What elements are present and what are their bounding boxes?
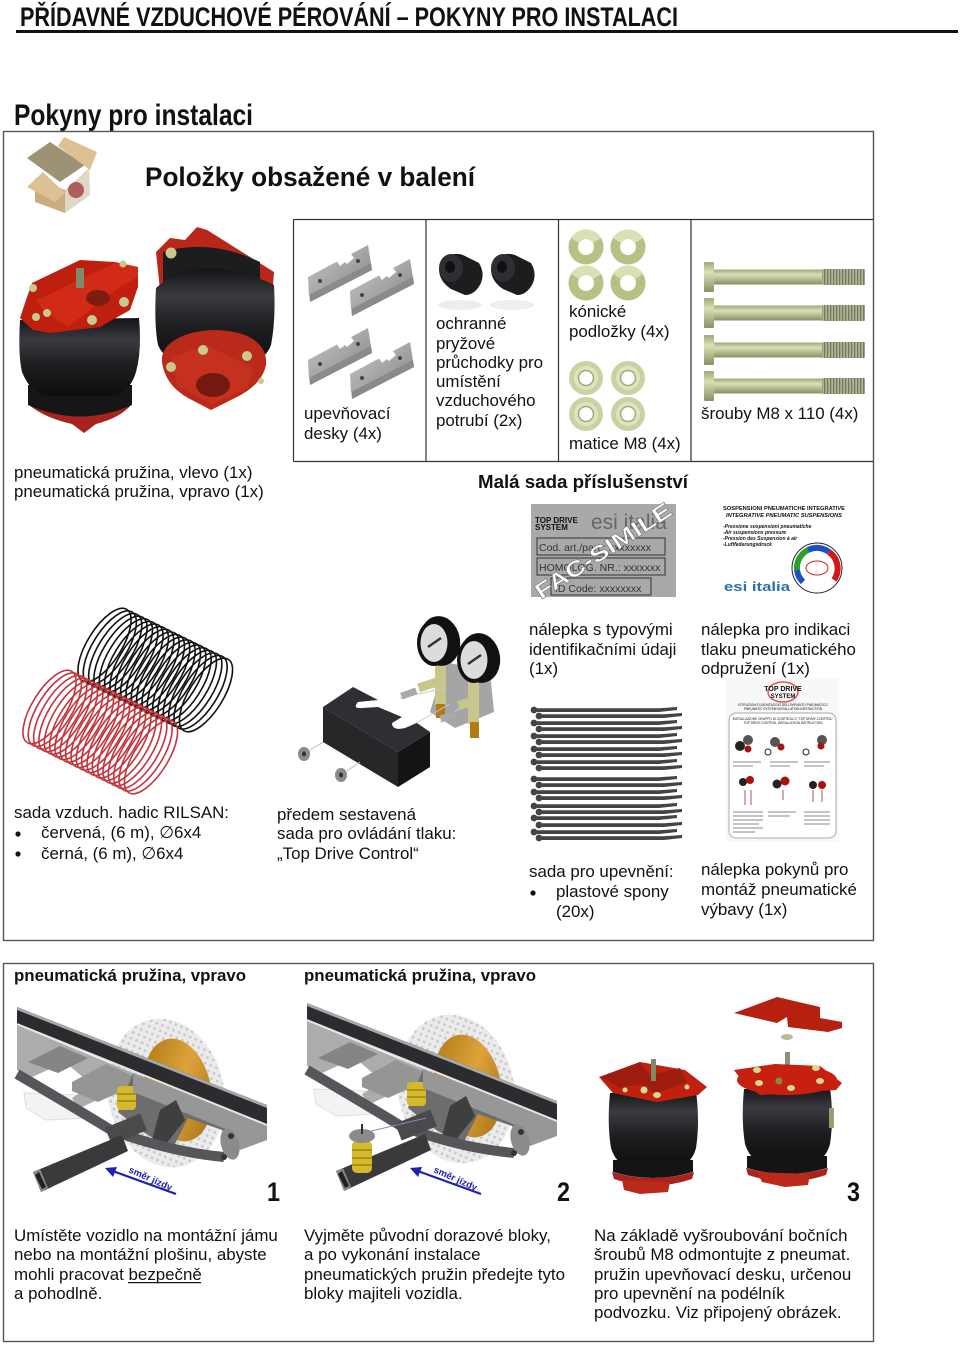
sticker: identification plate: SYSTEM — [535, 523, 568, 532]
text: step 1 instructions — [14, 1226, 278, 1303]
sticker: pressure indicator: -Pressione sospensioni pneumatiche — [723, 524, 812, 530]
text: step 1 instructions: a pohodlně. — [14, 1284, 102, 1303]
text: step 3 instructions: podvozku. Viz připojený obrázek. — [594, 1303, 842, 1322]
number: step 3: 3 — [847, 1177, 860, 1207]
label: hose kit: červená, (6 m), ∅6x4 — [41, 823, 201, 842]
label: fastening kit: plastové spony — [556, 882, 669, 901]
label: instruction sticker: montáž pneumatické — [701, 880, 857, 899]
sticker: identification plate: FAC-SIMILE — [530, 497, 676, 604]
sticker: installation instructions: SYSTEM — [771, 694, 795, 700]
label: air springs: pneumatická pružina, vpravo (1x) — [14, 482, 264, 501]
panel: package contents — [4, 132, 874, 940]
label: pressure sticker: odpružení (1x) — [701, 659, 810, 678]
text: step 3 instructions: pružin upevňovací desku, určenou — [594, 1265, 851, 1284]
illustration: step 1 vehicle axle — [17, 1007, 267, 1194]
section heading: Pokyny pro instalaci — [14, 99, 253, 132]
label: identification sticker: nálepka s typovými — [529, 620, 673, 639]
label: rubber grommets: průchodky pro — [436, 353, 543, 372]
sticker: installation instructions: TOP DRIVE — [764, 686, 802, 693]
sticker: identification plate: HOMOLOG. NR.: xxxxxxx — [539, 562, 661, 574]
label: pressure sticker: nálepka pro indikaci — [701, 620, 850, 639]
heading: small accessory kit: Malá sada příslušenství — [478, 471, 689, 492]
sticker: installation instructions: ISTRUZIONI DI MONTAGGIO DELL'IMPIANTO PNEUMATICO — [738, 703, 828, 707]
label: instruction sticker: nálepka pokynů pro — [701, 860, 848, 879]
sticker: installation instructions: INSTALLAZIONE GRUPPO DI CONTROLLO "TOP DRIVE CONTROL" — [733, 717, 833, 721]
illustration: step 3 air spring exploded — [734, 997, 842, 1187]
sticker: installation instructions: TOP DRIVE CONTROL INSTALLATION INSTRUCTION — [743, 721, 823, 725]
sticker: identification plate — [530, 497, 676, 604]
text: step 2 instructions: bloky majiteli vozidla. — [304, 1284, 463, 1303]
label: pressure control kit: předem sestavená — [277, 805, 417, 824]
text: step 1 instructions: Umístěte vozidlo na montážní jámu — [14, 1226, 278, 1245]
number: step 1: 1 — [267, 1177, 280, 1207]
illustration: mounting plates — [308, 245, 414, 399]
label: air springs: pneumatická pružina, vlevo (1x) — [14, 463, 252, 482]
label: instruction sticker: výbavy (1x) — [701, 900, 787, 919]
sticker: pressure indicator: INTEGRATIVE PNEUMATIC SUSPENSIONS — [726, 513, 842, 519]
label: rubber grommets: potrubí (2x) — [436, 411, 522, 430]
illustration: right air spring — [155, 227, 275, 410]
label: pressure control kit: sada pro ovládání tlaku: — [277, 824, 456, 843]
text: step 1 instructions: nebo na montážní plošinu, abyste — [14, 1245, 267, 1264]
text: step 2 instructions: a po vykonání instalace — [304, 1245, 481, 1264]
heading: items in package: Položky obsažené v balení — [145, 162, 476, 192]
label: pressure control kit: „Top Drive Control“ — [277, 844, 419, 863]
label: hose kit — [14, 803, 229, 863]
label: fastening kit: (20x) — [556, 902, 594, 921]
illustration: conical washers — [568, 230, 646, 300]
page title: PŘÍDAVNÉ VZDUCHOVÉ PÉROVÁNÍ – POKYNY PRO INSTALACI — [20, 1, 678, 32]
heading: step 2: pneumatická pružina, vpravo — [304, 966, 536, 985]
text: step 2 instructions: Vyjměte původní dorazové bloky, — [304, 1226, 551, 1245]
label: hose kit: černá, (6 m), ∅6x4 — [41, 844, 183, 863]
icon: cardboard box — [27, 137, 97, 213]
label: rubber grommets: pryžové — [436, 334, 495, 353]
sticker: pressure indicator: esi italia — [724, 579, 791, 594]
label: mounting plates: desky (4x) — [304, 424, 382, 443]
sticker: identification plate: ID Code: xxxxxxxx — [555, 583, 642, 595]
text: step 3 instructions: pro upevnění na podélník — [594, 1284, 785, 1303]
illustration: red hose coil — [13, 662, 188, 802]
label: fastening kit: sada pro upevnění: — [529, 862, 674, 881]
illustration: M8 bolts — [704, 262, 865, 401]
sticker: identification plate: TOP DRIVE — [535, 516, 578, 525]
sticker: pressure indicator: -Luftfederungsdruck — [723, 542, 772, 548]
label: rubber grommets: umístění — [436, 372, 501, 391]
text: step 3 instructions: šroubů M8 odmontujte z pneumat. — [594, 1245, 850, 1264]
label: fastening kit — [529, 862, 674, 921]
label: rubber grommets: ochranné — [436, 314, 506, 333]
heading: step 1: pneumatická pružina, vpravo — [14, 966, 246, 985]
number: step 2: 2 — [557, 1177, 570, 1207]
illustration: cable ties — [531, 707, 682, 841]
sticker: installation instructions — [725, 678, 839, 841]
illustration: left air spring — [19, 260, 140, 433]
illustration: step 2 vehicle axle with bump stop removed — [307, 1003, 557, 1194]
illustration: Top Drive Control kit — [298, 613, 504, 787]
sticker: pressure indicator: -Air suspensions pressure — [723, 530, 786, 536]
sticker: pressure indicator: SOSPENSIONI PNEUMATICHE INTEGRATIVE — [723, 506, 845, 512]
text: step 1 instructions: mohli pracovat bezpečně — [14, 1265, 202, 1284]
label: identification sticker: identifikačními údaji — [529, 640, 676, 659]
label: M8 nuts: matice M8 (4x) — [569, 434, 681, 453]
label: identification sticker: (1x) — [529, 659, 558, 678]
label: mounting plates: upevňovací — [304, 404, 391, 423]
sticker: pressure indicator — [723, 506, 845, 594]
label: rubber grommets: vzduchového — [436, 391, 536, 410]
text: step 3 instructions: Na základě vyšroubování bočních — [594, 1226, 848, 1245]
sticker: pressure indicator: -Pression des Suspension à air — [723, 536, 798, 542]
text: step 2 instructions: pneumatických pružin předejte tyto — [304, 1265, 565, 1284]
label: conical washers: kónické — [569, 302, 626, 321]
illustration: rubber grommets — [438, 254, 535, 310]
label: M8 bolts: šrouby M8 x 110 (4x) — [701, 404, 858, 423]
label: hose kit: sada vzduch. hadic RILSAN: — [14, 803, 229, 822]
sticker: identification plate: Cod. art./part.: xxxxxxxx — [539, 542, 652, 554]
illustration: M8 nuts — [569, 361, 645, 431]
label: conical washers: podložky (4x) — [569, 322, 669, 341]
label: pressure sticker: tlaku pneumatického — [701, 640, 856, 659]
panel: installation steps — [4, 964, 874, 1342]
sticker: identification plate: esi italia — [591, 511, 667, 534]
illustration: step 3 air spring left assembled — [599, 1059, 707, 1194]
sticker: installation instructions: PNEUMATIC SYSTEM INSTALLATION INSTRUCTION — [744, 707, 823, 711]
illustration: black hose coil — [68, 600, 243, 740]
